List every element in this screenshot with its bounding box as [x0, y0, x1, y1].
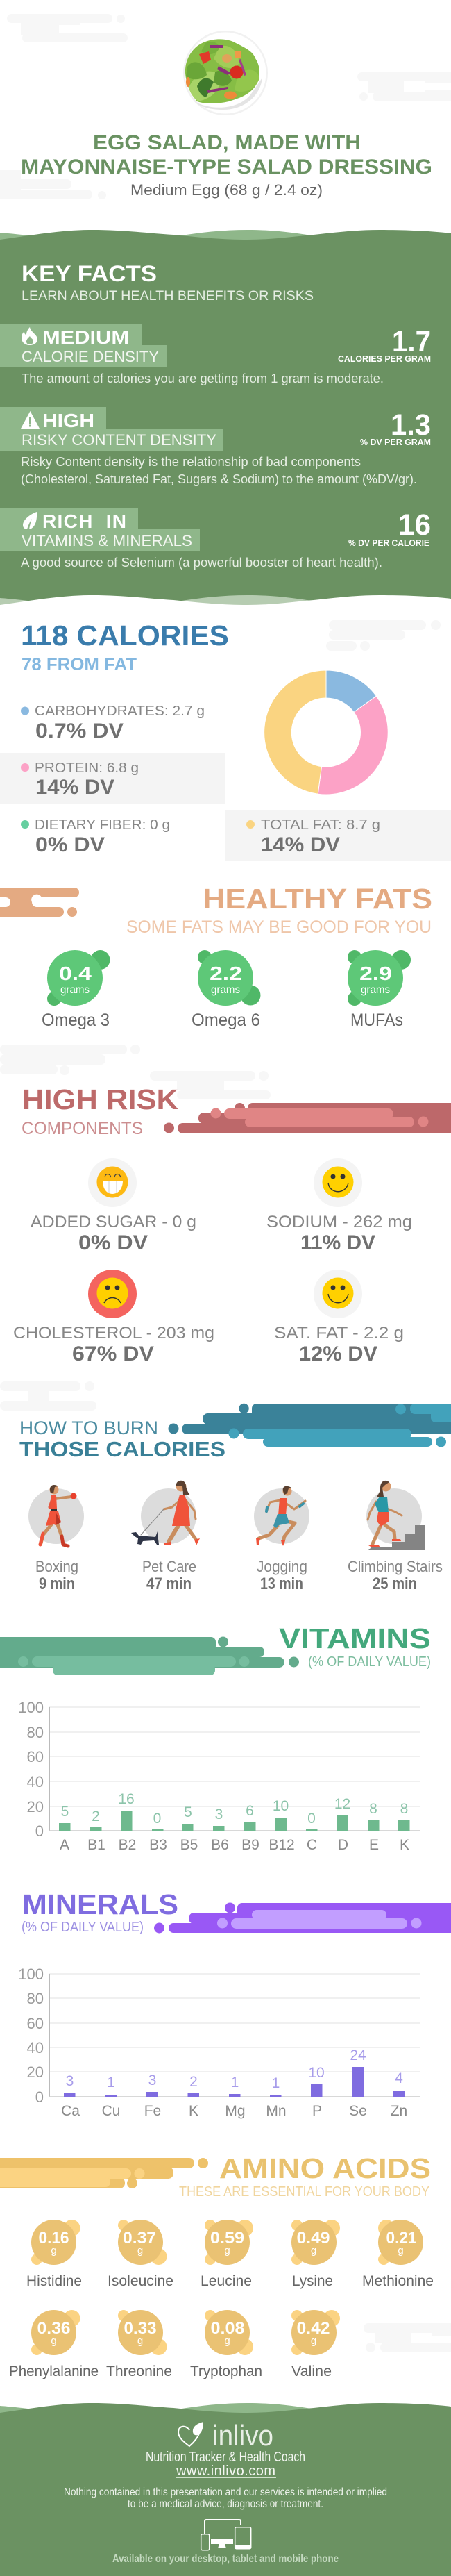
bar chart: minerals [18, 1966, 420, 2119]
subheading: minerals: (% OF DAILY VALUE) [22, 1920, 144, 1935]
stat: dietary fiber: 0% DV [35, 833, 105, 856]
stat: cholesterol [13, 1270, 214, 1365]
badge: omega 3: 0.4 [59, 963, 92, 984]
bar chart: vitamins: 0 [307, 1811, 316, 1827]
bar chart: vitamins: B3 [149, 1837, 167, 1853]
stat: protein: 14% DV [35, 776, 114, 799]
fact: risky content density: % DV PER GRAM [360, 437, 431, 447]
stat: total fat: TOTAL FAT: 8.7 g [261, 817, 380, 833]
amino badge: tryptophan: Tryptophan [190, 2363, 262, 2379]
badge: omega 6 [192, 950, 261, 1030]
badge: omega 3 [42, 950, 110, 1030]
stat: sodium [266, 1158, 412, 1254]
activity: boxing [28, 1485, 84, 1593]
stat: cholesterol: 67% DV [72, 1343, 154, 1365]
subheading: amino acids: THESE ARE ESSENTIAL FOR YOUR BODY [179, 2184, 429, 2200]
bar chart: minerals: 3 [148, 2072, 156, 2088]
icon: devices [201, 2520, 251, 2550]
bar chart: vitamins: 2 [92, 1809, 100, 1825]
bar chart: vitamins: B12 [269, 1837, 295, 1853]
amino badge: valine: Valine [291, 2363, 332, 2379]
fact: calorie density [0, 324, 431, 385]
bar chart: minerals: 24 [350, 2047, 366, 2063]
fact: vitamins and minerals: % DV PER CALORIE [348, 538, 429, 548]
amino badge: methionine: Methionine [362, 2273, 434, 2289]
bar chart: vitamins: 3 [215, 1806, 223, 1822]
amino badge: lysine: 0.49 [297, 2229, 330, 2247]
bar chart: minerals: K [189, 2103, 198, 2119]
bar chart: minerals: Se [349, 2103, 367, 2119]
amino badge: leucine [201, 2220, 253, 2289]
decoration: minerals banner [154, 1903, 451, 1934]
panel: minerals [18, 1888, 451, 2119]
bar chart: minerals: Cu [102, 2103, 120, 2119]
amino badge: threonine [106, 2310, 172, 2379]
stat: total fat [246, 817, 380, 856]
fact: vitamins and minerals: RICH IN [42, 510, 126, 532]
icon: inlivo heart logo [178, 2422, 203, 2446]
bar chart: minerals: Fe [144, 2103, 161, 2119]
bar chart: minerals: Ca [61, 2103, 80, 2119]
subheading: components: COMPONENTS [22, 1119, 143, 1138]
tagline: Nutrition Tracker & Health Coach [146, 2450, 305, 2465]
bar chart: vitamins: 8 [369, 1801, 377, 1817]
bar chart: minerals: 2 [189, 2074, 198, 2090]
bar chart: minerals: 4 [395, 2070, 403, 2086]
amino badge: lysine [291, 2220, 340, 2289]
subheading: healthy fats: SOME FATS MAY BE GOOD FOR YOU [126, 917, 432, 937]
stat: saturated fat: SAT. FAT - 2.2 g [274, 1324, 404, 1343]
subheading: from fat: 78 FROM FAT [22, 655, 137, 674]
bar chart: vitamins: B9 [241, 1837, 259, 1853]
amino badge: methionine [362, 2220, 434, 2289]
bar chart: minerals: 10 [308, 2065, 325, 2081]
stat: added sugar: 0% DV [78, 1231, 148, 1254]
icon: warning triangle [21, 411, 40, 429]
badge: omega 6: grams [211, 984, 240, 996]
icon: dog [131, 1531, 159, 1545]
disclaimer [64, 2486, 387, 2510]
bar chart: vitamins: 5 [184, 1804, 192, 1820]
value: boxing minutes: 9 min [39, 1574, 75, 1593]
bar chart: vitamins: 10 [273, 1798, 289, 1814]
bar chart: vitamins: 5 [61, 1804, 69, 1820]
bar chart: minerals: 1 [231, 2075, 239, 2091]
amino badge: isoleucine: g [137, 2245, 143, 2257]
panel: footer [0, 2403, 451, 2576]
fact: calorie density: CALORIE DENSITY [22, 348, 159, 365]
badge: mufas [348, 950, 411, 1030]
heading: high risk: HIGH RISK [22, 1083, 178, 1115]
value: climbing minutes: 25 min [373, 1574, 417, 1593]
amino badge: isoleucine [108, 2220, 173, 2289]
icon: flame [22, 327, 37, 345]
bar chart: vitamins: K [400, 1837, 409, 1853]
stat: dietary fiber [21, 817, 170, 856]
activity: climbing stairs [348, 1481, 443, 1593]
decoration: burn banner [168, 1404, 451, 1447]
stat: sodium: SODIUM - 262 mg [266, 1213, 412, 1231]
bar chart: vitamins: D [338, 1837, 348, 1853]
panel: calories [0, 620, 451, 861]
stat: total fat: 14% DV [261, 833, 340, 856]
bar chart: vitamins: 60 [27, 1748, 44, 1765]
total fat row background [226, 810, 451, 861]
panel: high risk [13, 1083, 451, 1365]
panel: healthy fats [0, 883, 432, 1030]
subheading: vitamins: (% OF DAILY VALUE) [308, 1654, 431, 1670]
decoration: high risk banner [164, 1103, 451, 1133]
bar chart: vitamins: 40 [27, 1773, 44, 1790]
value: pet care minutes: 47 min [146, 1574, 192, 1593]
amino badge: threonine: Threonine [106, 2363, 172, 2379]
bar chart: vitamins: 0 [153, 1811, 161, 1827]
bar chart: minerals: 40 [27, 2039, 44, 2056]
badge: omega 3: Omega 3 [42, 1011, 110, 1030]
amino badge: tryptophan [190, 2310, 262, 2379]
fact: risky content density: (Cholesterol, Saturated Fat, Sugars & Sodium) to the amount (%DV/gr). [21, 472, 417, 486]
amino badge: lysine: g [311, 2245, 316, 2257]
amino badge: isoleucine: 0.37 [123, 2229, 156, 2247]
disclaimer: to be a medical advice, diagnosis or treatment. [128, 2498, 323, 2510]
panel: vitamins [0, 1622, 431, 1853]
fact: calorie density: 1.7 [392, 325, 431, 358]
amino badge: valine: 0.42 [297, 2319, 330, 2338]
stat: carbohydrates: 0.7% DV [35, 720, 124, 742]
heading: those calories: THOSE CALORIES [19, 1437, 226, 1461]
amino badge: phenylalanine: g [51, 2335, 57, 2347]
fact: risky content density: HIGH [42, 410, 94, 431]
amino badge: isoleucine: Isoleucine [108, 2273, 173, 2289]
donut chart [264, 670, 388, 795]
bar chart: vitamins: 12 [334, 1796, 350, 1812]
activity: pet care [131, 1481, 200, 1593]
label: boxing: Boxing [35, 1558, 78, 1575]
bar chart: minerals: 20 [27, 2063, 44, 2081]
amino badge: tryptophan: g [224, 2335, 230, 2347]
subtitle: Medium Egg (68 g / 2.4 oz) [130, 181, 323, 199]
title: EGG SALAD, MADE WITH [93, 131, 361, 154]
bar chart: vitamins: A [60, 1837, 69, 1853]
fact: calorie density: MEDIUM [42, 326, 129, 348]
heading: calories: 118 CALORIES [21, 620, 229, 651]
stat: saturated fat [274, 1270, 404, 1365]
bar chart: vitamins: 16 [118, 1791, 135, 1807]
bar chart: minerals: Mg [225, 2103, 246, 2119]
badge: mufas: grams [361, 984, 390, 996]
fact: risky content density [0, 407, 431, 486]
amino badge: histidine: Histidine [26, 2273, 82, 2289]
logo text: inlivo: inlivo [212, 2419, 273, 2452]
amino badge: histidine: 0.16 [39, 2229, 69, 2247]
stat: protein [21, 761, 139, 799]
bar chart: minerals: P [312, 2103, 322, 2119]
amino badge: histidine [26, 2220, 82, 2289]
fact: risky content density: 1.3 [391, 408, 431, 442]
subheading: key facts: LEARN ABOUT HEALTH BENEFITS OR RISKS [22, 288, 314, 304]
bar chart: minerals: 80 [27, 1990, 44, 2007]
label: pet care: Pet Care [142, 1558, 196, 1575]
label: jogging: Jogging [257, 1558, 307, 1575]
website link: www.inlivo.com [176, 2463, 275, 2479]
amino badge: threonine: 0.33 [124, 2319, 157, 2338]
bar chart: vitamins: B6 [211, 1837, 229, 1853]
stat: carbohydrates [21, 704, 205, 742]
amino badge: phenylalanine: 0.36 [37, 2319, 71, 2338]
icon: leaf [23, 512, 37, 529]
bar chart: vitamins: 6 [246, 1803, 254, 1819]
bar chart: vitamins: 100 [18, 1699, 44, 1716]
protein row background [0, 753, 226, 804]
amino badge: tryptophan: 0.08 [211, 2319, 244, 2338]
heading: vitamins: VITAMINS [279, 1622, 431, 1654]
title: MAYONNAISE-TYPE SALAD DRESSING [21, 156, 432, 178]
availability note: Available on your desktop, tablet and mobile phone [112, 2553, 339, 2565]
amino badge: methionine: g [398, 2245, 404, 2257]
bar chart: minerals: Zn [391, 2103, 407, 2119]
amino badge: leucine: Leucine [201, 2273, 252, 2289]
amino badge: leucine: 0.59 [210, 2229, 244, 2247]
heading: healthy fats: HEALTHY FATS [203, 883, 432, 915]
heading: minerals: MINERALS [22, 1888, 178, 1920]
bar chart: vitamins: E [369, 1837, 379, 1853]
bar chart: vitamins: 20 [27, 1798, 44, 1815]
amino badge: phenylalanine [9, 2310, 99, 2379]
bar chart: minerals: 1 [107, 2075, 115, 2091]
amino badge: histidine: g [51, 2245, 57, 2257]
bar chart: vitamins: C [307, 1837, 317, 1853]
badge: mufas: 2.9 [359, 963, 392, 984]
stat: saturated fat: 12% DV [299, 1343, 377, 1365]
stat: cholesterol: CHOLESTEROL - 203 mg [13, 1324, 214, 1343]
decoration: healthy fats banner [0, 888, 79, 917]
amino badge: methionine: 0.21 [386, 2229, 416, 2247]
amino badge: lysine: Lysine [292, 2273, 333, 2289]
bar chart: vitamins: 8 [400, 1801, 408, 1817]
amino badge: valine: g [311, 2335, 316, 2347]
stat: carbohydrates: CARBOHYDRATES: 2.7 g [35, 704, 205, 719]
fact: risky content density: RISKY CONTENT DENSITY [22, 431, 216, 449]
decoration: amino acids banner [0, 2158, 208, 2188]
heading: key facts: KEY FACTS [22, 261, 157, 286]
bar chart: vitamins: 0 [35, 1822, 44, 1840]
amino badge: valine [291, 2310, 340, 2379]
stat: added sugar [31, 1158, 196, 1254]
value: jogging minutes: 13 min [260, 1574, 303, 1593]
amino badge: leucine: g [224, 2245, 230, 2257]
fact: calorie density: The amount of calories you are getting from 1 gram is moderate. [22, 372, 384, 385]
bar chart: vitamins: B5 [180, 1837, 198, 1853]
bar chart: minerals: 100 [18, 1966, 44, 1983]
stat: dietary fiber: DIETARY FIBER: 0 g [35, 817, 170, 833]
badge: omega 6: Omega 6 [192, 1011, 260, 1030]
panel: amino acids [0, 2152, 434, 2379]
fact: risky content density: Risky Content density is the relationship of bad components [21, 455, 361, 469]
panel: how to burn those calories [19, 1404, 451, 1593]
bar chart: minerals: Mn [266, 2103, 287, 2119]
badge: mufas: MUFAs [350, 1011, 403, 1030]
heading: how to burn: HOW TO BURN [19, 1418, 158, 1438]
icon: stairs [368, 1525, 425, 1550]
decoration: vitamins banner [0, 1636, 299, 1675]
stat: protein: PROTEIN: 6.8 g [35, 761, 139, 776]
disclaimer: Nothing contained in this presentation and our services is intended or implied [64, 2486, 387, 2498]
fact: vitamins and minerals: VITAMINS & MINERALS [22, 532, 192, 549]
fact: vitamins and minerals [0, 508, 431, 570]
badge: omega 6: 2.2 [210, 963, 242, 984]
bar chart: minerals: 0 [35, 2088, 44, 2106]
label: climbing stairs: Climbing Stairs [348, 1558, 443, 1575]
bar chart: vitamins [18, 1699, 420, 1853]
stat: sodium: 11% DV [300, 1231, 375, 1254]
badge: omega 3: grams [60, 984, 90, 996]
amino badge: threonine: g [137, 2335, 143, 2347]
fact: calorie density: CALORIES PER GRAM [338, 354, 431, 364]
bar chart: vitamins: B2 [119, 1837, 136, 1853]
amino badge: phenylalanine: Phenylalanine [9, 2363, 99, 2379]
fact: vitamins and minerals: 16 [398, 508, 431, 542]
icon: salad bowl [183, 31, 268, 115]
stat: added sugar: ADDED SUGAR - 0 g [31, 1213, 196, 1231]
bar chart: vitamins: 80 [27, 1724, 44, 1741]
panel: key facts [0, 230, 451, 611]
bar chart: vitamins: B1 [87, 1837, 105, 1853]
title [21, 131, 432, 178]
bar chart: minerals: 3 [66, 2073, 74, 2089]
fact: vitamins and minerals: A good source of Selenium (a powerful booster of heart health). [21, 556, 382, 570]
bar chart: minerals: 60 [27, 2015, 44, 2032]
heading: amino acids: AMINO ACIDS [219, 2152, 431, 2184]
bar chart: minerals: 1 [272, 2075, 280, 2091]
activity: jogging [254, 1486, 309, 1593]
